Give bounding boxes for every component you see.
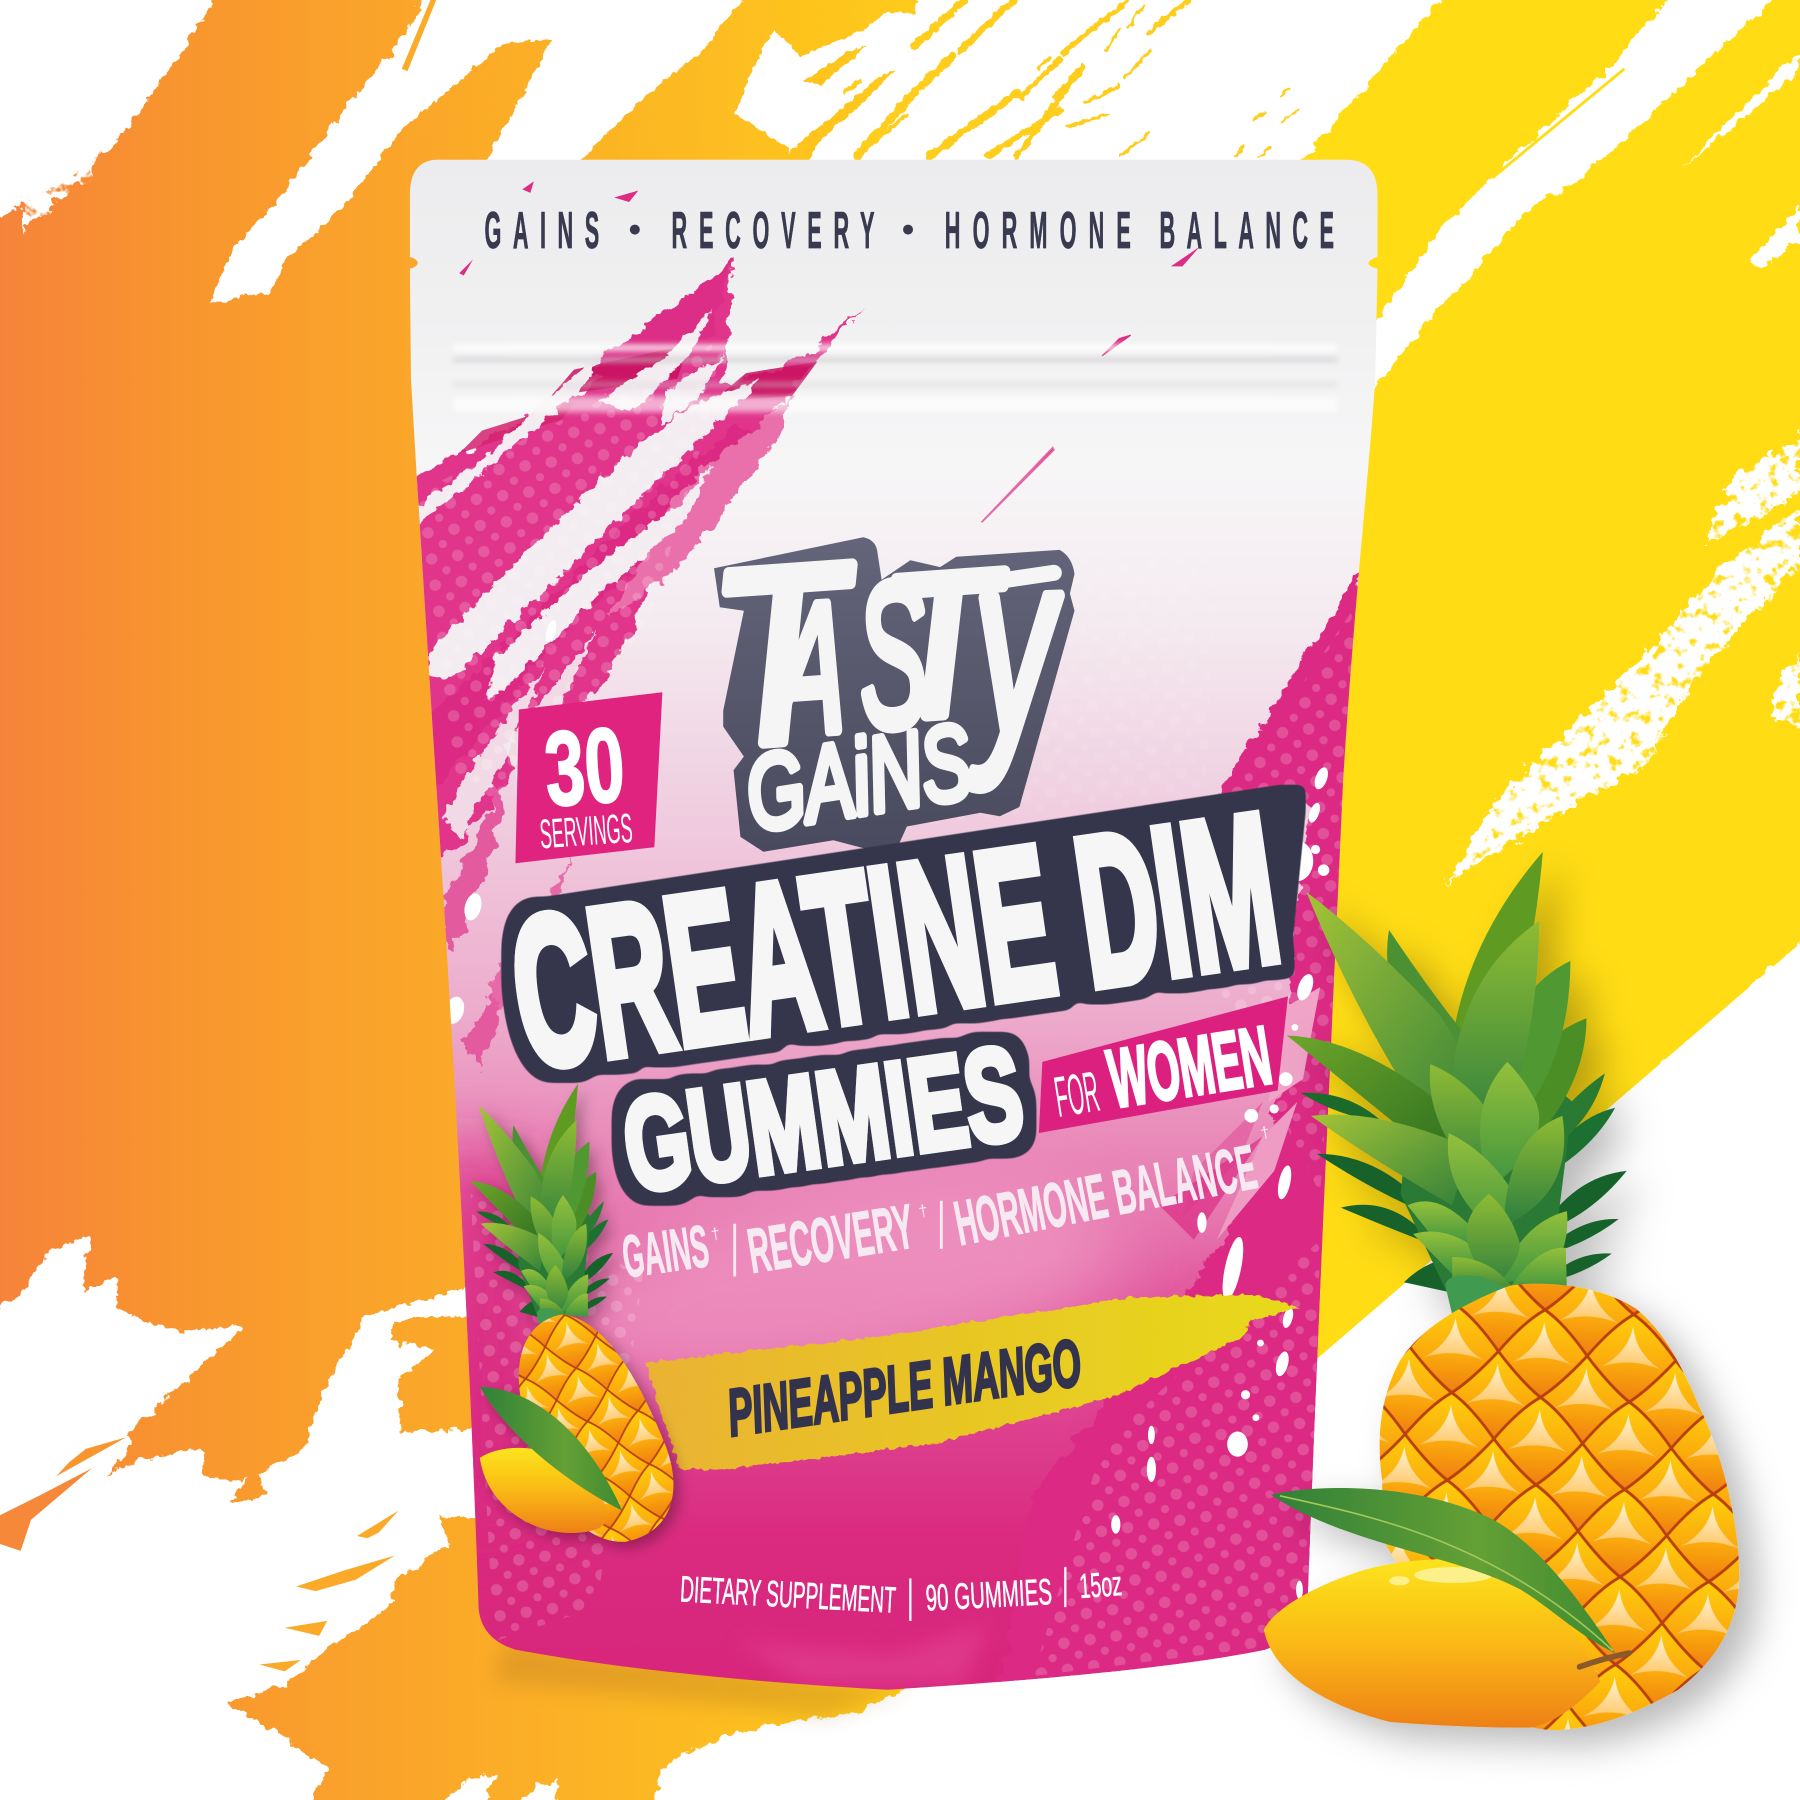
separator two (940, 1201, 943, 1249)
benefits line: RECOVERY (743, 1192, 919, 1287)
for women banner (1039, 996, 1288, 1133)
orange flecks and wedges on white (0, 0, 436, 1671)
pouch shadow (494, 1642, 907, 1716)
small pineapple crown (470, 1084, 613, 1329)
mango leaf (1271, 1488, 1615, 1653)
product pouch: HORMONE BALANCE (949, 1132, 1262, 1259)
benefit dagger: † (710, 1225, 721, 1244)
gummies count: 90 GUMMIES (925, 1571, 1053, 1619)
tagline word: recovery: RECOVERY (672, 202, 875, 260)
flavour brush (645, 1295, 1299, 1469)
pouch body gradient (390, 149, 1401, 1699)
pink brush strokes, left (402, 261, 864, 1068)
hairline yellow inside white streak (1492, 69, 1624, 178)
top brush: thin yellow flecks (844, 0, 1299, 156)
tagline word: balance: BALANCE (1159, 202, 1334, 260)
halftone dots (416, 333, 1361, 1676)
net contents line (679, 1565, 1123, 1621)
small mango (480, 1448, 607, 1533)
product title (499, 769, 1293, 1219)
top tagline (485, 211, 1334, 249)
separator (733, 1224, 736, 1277)
pink brush strokes, fold band darkening (459, 344, 817, 453)
30 servings badge (515, 692, 662, 863)
light centre glow (570, 1174, 1133, 1428)
product pouch (390, 149, 1401, 1699)
logo outline (714, 537, 1074, 852)
small mango leaf (480, 1387, 622, 1511)
small pineapple body (519, 1314, 673, 1542)
logo word: Tasty: T (702, 510, 868, 799)
tagline bullet one (630, 225, 639, 234)
pouch bottom wrinkle highlight (760, 1631, 980, 1686)
for women banner: FOR (1050, 1060, 1104, 1130)
logo word: Tasty: A (764, 563, 851, 775)
logo word: Gains: GAiNS (738, 702, 979, 854)
large pineapple and mango (1264, 852, 1739, 1730)
balance dagger: † (1259, 1123, 1271, 1143)
benefits line: GAINS (618, 1212, 713, 1291)
white paint splatter dots (442, 619, 1331, 1599)
mango stem (1580, 1653, 1629, 1667)
tagline word: gains: GAINS (484, 202, 599, 260)
tagline word: hormone: HORMONE (945, 202, 1131, 260)
logo word: Tasty (702, 497, 1069, 799)
deep pink edges (436, 1148, 1355, 1642)
logo word: Tasty: y (960, 497, 1069, 790)
net weight: 15oz (1078, 1565, 1123, 1606)
brush strokes: mottled white streaks (23, 92, 1800, 885)
dietary supplement: DIETARY SUPPLEMENT (679, 1568, 897, 1621)
logo t crossbar swash (976, 573, 1054, 584)
pineapple body (1380, 1284, 1739, 1730)
separator two (1064, 1567, 1066, 1607)
servings count: 30 (541, 706, 628, 829)
separator (909, 1578, 911, 1621)
mango leaf midrib (1280, 1496, 1613, 1651)
logo word: Tasty: S (850, 540, 934, 772)
mango (1264, 1559, 1600, 1728)
logo word: Tasty: T (873, 528, 1017, 762)
mango highlight small (1389, 1576, 1410, 1585)
30 servings badge: SERVINGS (538, 805, 634, 857)
pineapple crown (1287, 852, 1627, 1314)
label: women: WOMEN (1102, 1008, 1277, 1126)
pouch zipper seal lines (453, 344, 1337, 412)
tagline bullet two (903, 225, 913, 234)
top brush: yellow masses over white (402, 0, 918, 166)
white scratches across pink brush (413, 310, 758, 838)
flavour name: PINEAPPLE MANGO (723, 1326, 1086, 1451)
recovery dagger: † (917, 1202, 929, 1221)
thin pink flecks (459, 181, 1320, 1240)
title line: Gummies: GUMMIES (615, 1019, 1031, 1219)
benefits line (618, 1123, 1271, 1291)
title backing (540, 798, 1293, 1062)
Tasty Gains logo (702, 497, 1074, 854)
small fruit illustration on pouch (470, 1084, 673, 1542)
pink brush right (999, 569, 1366, 1699)
mango highlight (1414, 1567, 1492, 1583)
logo lettering (702, 497, 1069, 854)
